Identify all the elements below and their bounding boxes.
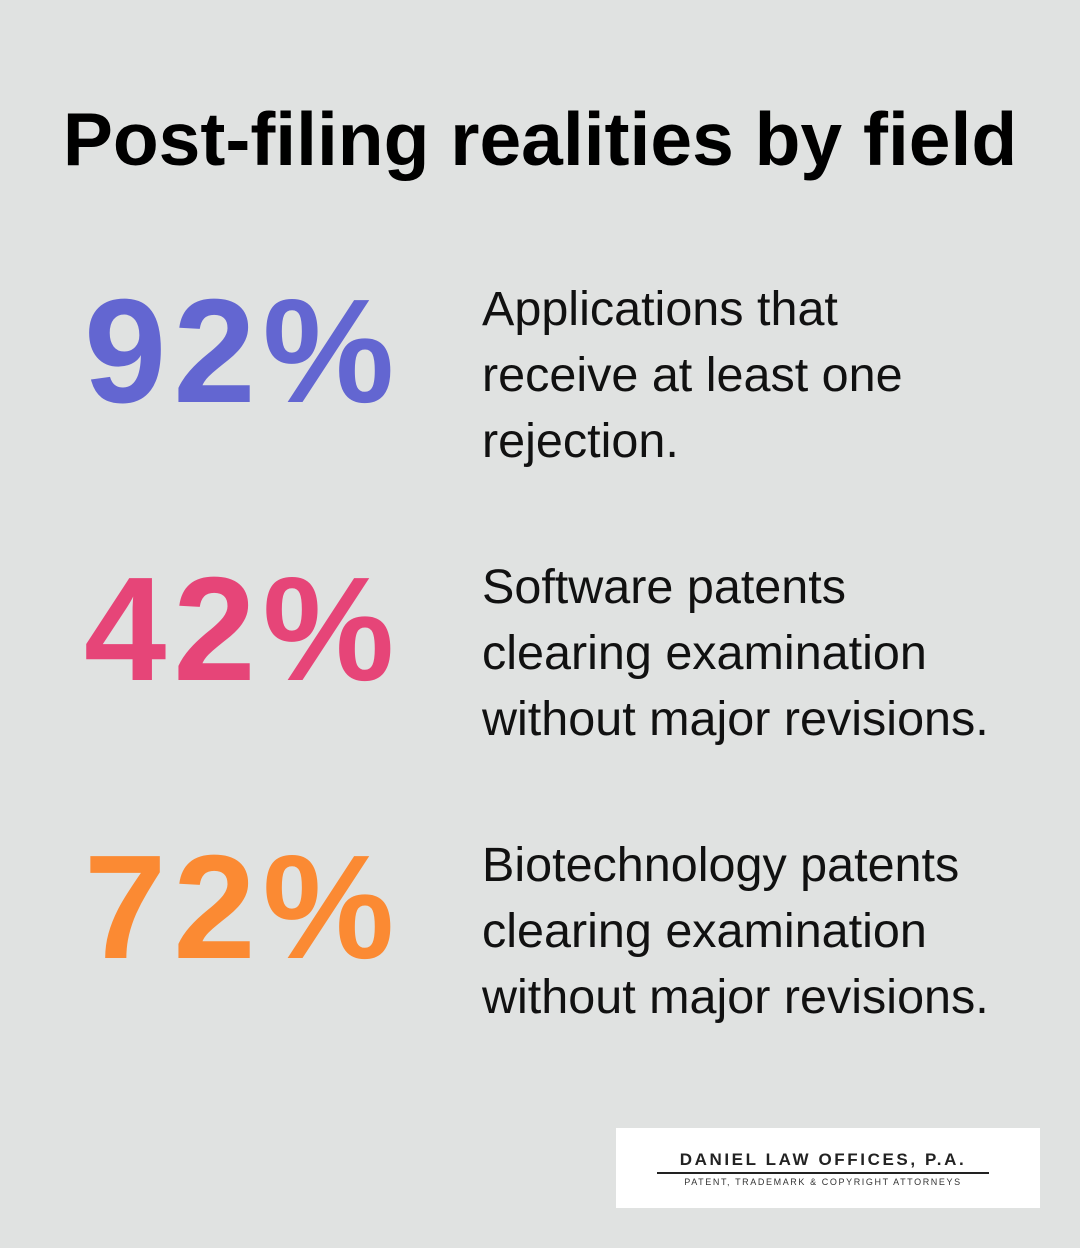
text: 92% description: Applications that [482, 282, 838, 336]
text: 72% description: clearing examination [482, 904, 927, 958]
stat: 72%: 72% [84, 825, 401, 990]
stat: 42%: 42% [84, 547, 401, 712]
text: 92% description [482, 282, 903, 468]
text: 72% description: without major revisions. [482, 970, 989, 1024]
text: 92% description: receive at least one [482, 348, 903, 402]
text: 42% description: Software patents [482, 560, 846, 614]
logo: PATENT, TRADEMARK & COPYRIGHT ATTORNEYS [684, 1177, 962, 1187]
text: 72% description: Biotechnology patents [482, 838, 959, 892]
text: 72% description [482, 838, 989, 1024]
logo [616, 1128, 1040, 1208]
text: 42% description: clearing examination [482, 626, 927, 680]
text: 42% description [482, 560, 989, 746]
title: Post-filing realities by field [63, 97, 1017, 181]
logo: DANIEL LAW OFFICES, P.A. [680, 1150, 966, 1169]
stat: 92%: 92% [84, 269, 401, 434]
text: 92% description: rejection. [482, 414, 679, 468]
text: 42% description: without major revisions. [482, 692, 989, 746]
